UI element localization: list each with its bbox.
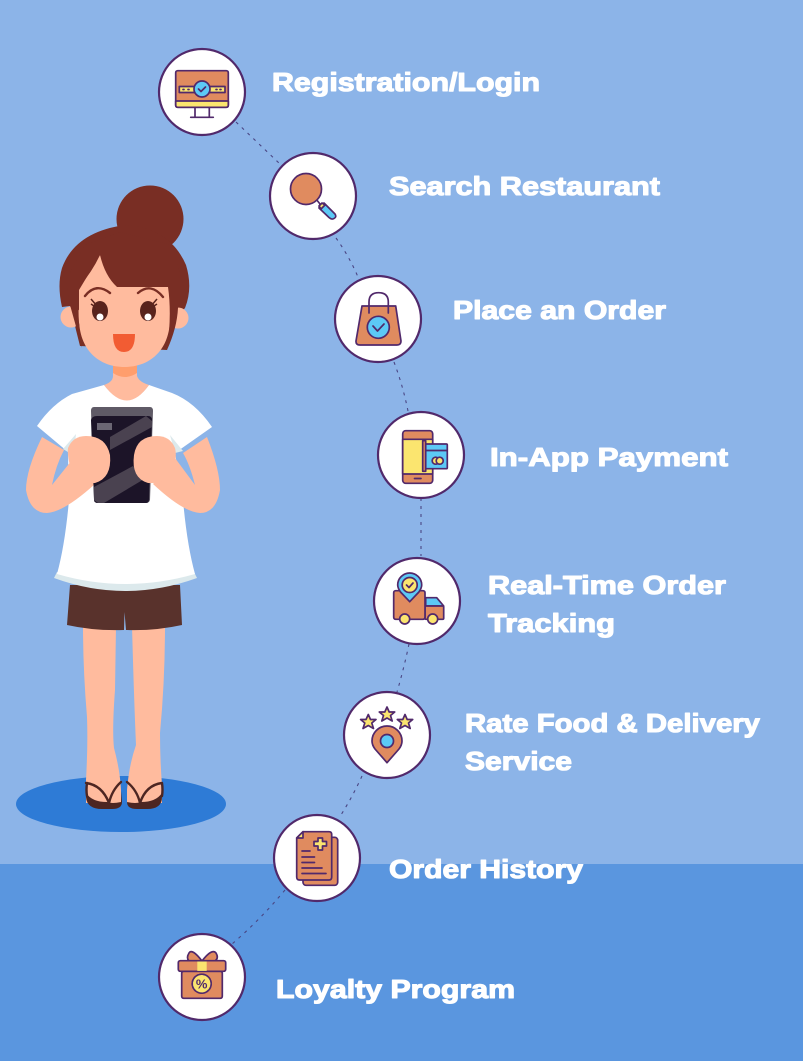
hands bbox=[68, 436, 110, 483]
character: woman holding a phone bbox=[16, 186, 226, 832]
step 6 label: Service bbox=[465, 746, 572, 776]
dotted connector path bbox=[232, 122, 421, 944]
step 7 label: Order History bbox=[389, 854, 584, 884]
hair back bbox=[60, 225, 189, 350]
neck shadow bbox=[113, 364, 137, 377]
mouth bbox=[113, 334, 135, 352]
step 4 icon: phone and card bbox=[378, 412, 464, 498]
sleeve shadows bbox=[63, 434, 183, 453]
bun bbox=[116, 186, 184, 252]
ground shadow ellipse bbox=[16, 776, 226, 832]
legs bbox=[83, 626, 121, 803]
ears bbox=[60, 306, 82, 328]
eyes bbox=[91, 299, 157, 321]
step 2 label: Search Restaurant bbox=[389, 171, 660, 201]
shorts bbox=[67, 585, 182, 630]
step 8 label: Loyalty Program bbox=[276, 974, 515, 1004]
step 3 label: Place an Order bbox=[453, 295, 666, 325]
step 5 label bbox=[488, 570, 726, 638]
step 7 icon: order documents bbox=[274, 815, 360, 901]
step 5 icon: delivery truck with pin bbox=[374, 558, 460, 644]
step 1 label: Registration/Login bbox=[272, 67, 540, 97]
step 5 label: Tracking bbox=[488, 608, 615, 638]
step 3 icon: shopping bag bbox=[335, 276, 421, 362]
background: darker lower band bbox=[0, 864, 803, 1061]
shirt hem bbox=[54, 572, 197, 591]
step 5 label: Real-Time Order bbox=[488, 570, 726, 600]
fringe and side locks bbox=[66, 232, 186, 350]
step 8 icon: loyalty gift box bbox=[159, 934, 245, 1020]
step 6 label: Rate Food & Delivery bbox=[465, 708, 761, 738]
face bbox=[79, 255, 170, 367]
step 4 label: In-App Payment bbox=[490, 442, 728, 472]
phone bbox=[91, 407, 153, 503]
right sandal bbox=[127, 782, 162, 809]
step 8 icon: loyalty gift box: % bbox=[196, 976, 208, 992]
step 2 icon: magnifier bbox=[270, 153, 356, 239]
eyebrows bbox=[85, 288, 163, 297]
step 1 icon: monitor bbox=[159, 49, 245, 135]
step 6 label bbox=[465, 708, 761, 776]
shirt bbox=[37, 385, 212, 584]
arms bbox=[26, 437, 95, 513]
step 6 icon: rating stars and pin bbox=[344, 692, 430, 778]
neck bbox=[104, 362, 149, 400]
left sandal bbox=[86, 782, 122, 809]
